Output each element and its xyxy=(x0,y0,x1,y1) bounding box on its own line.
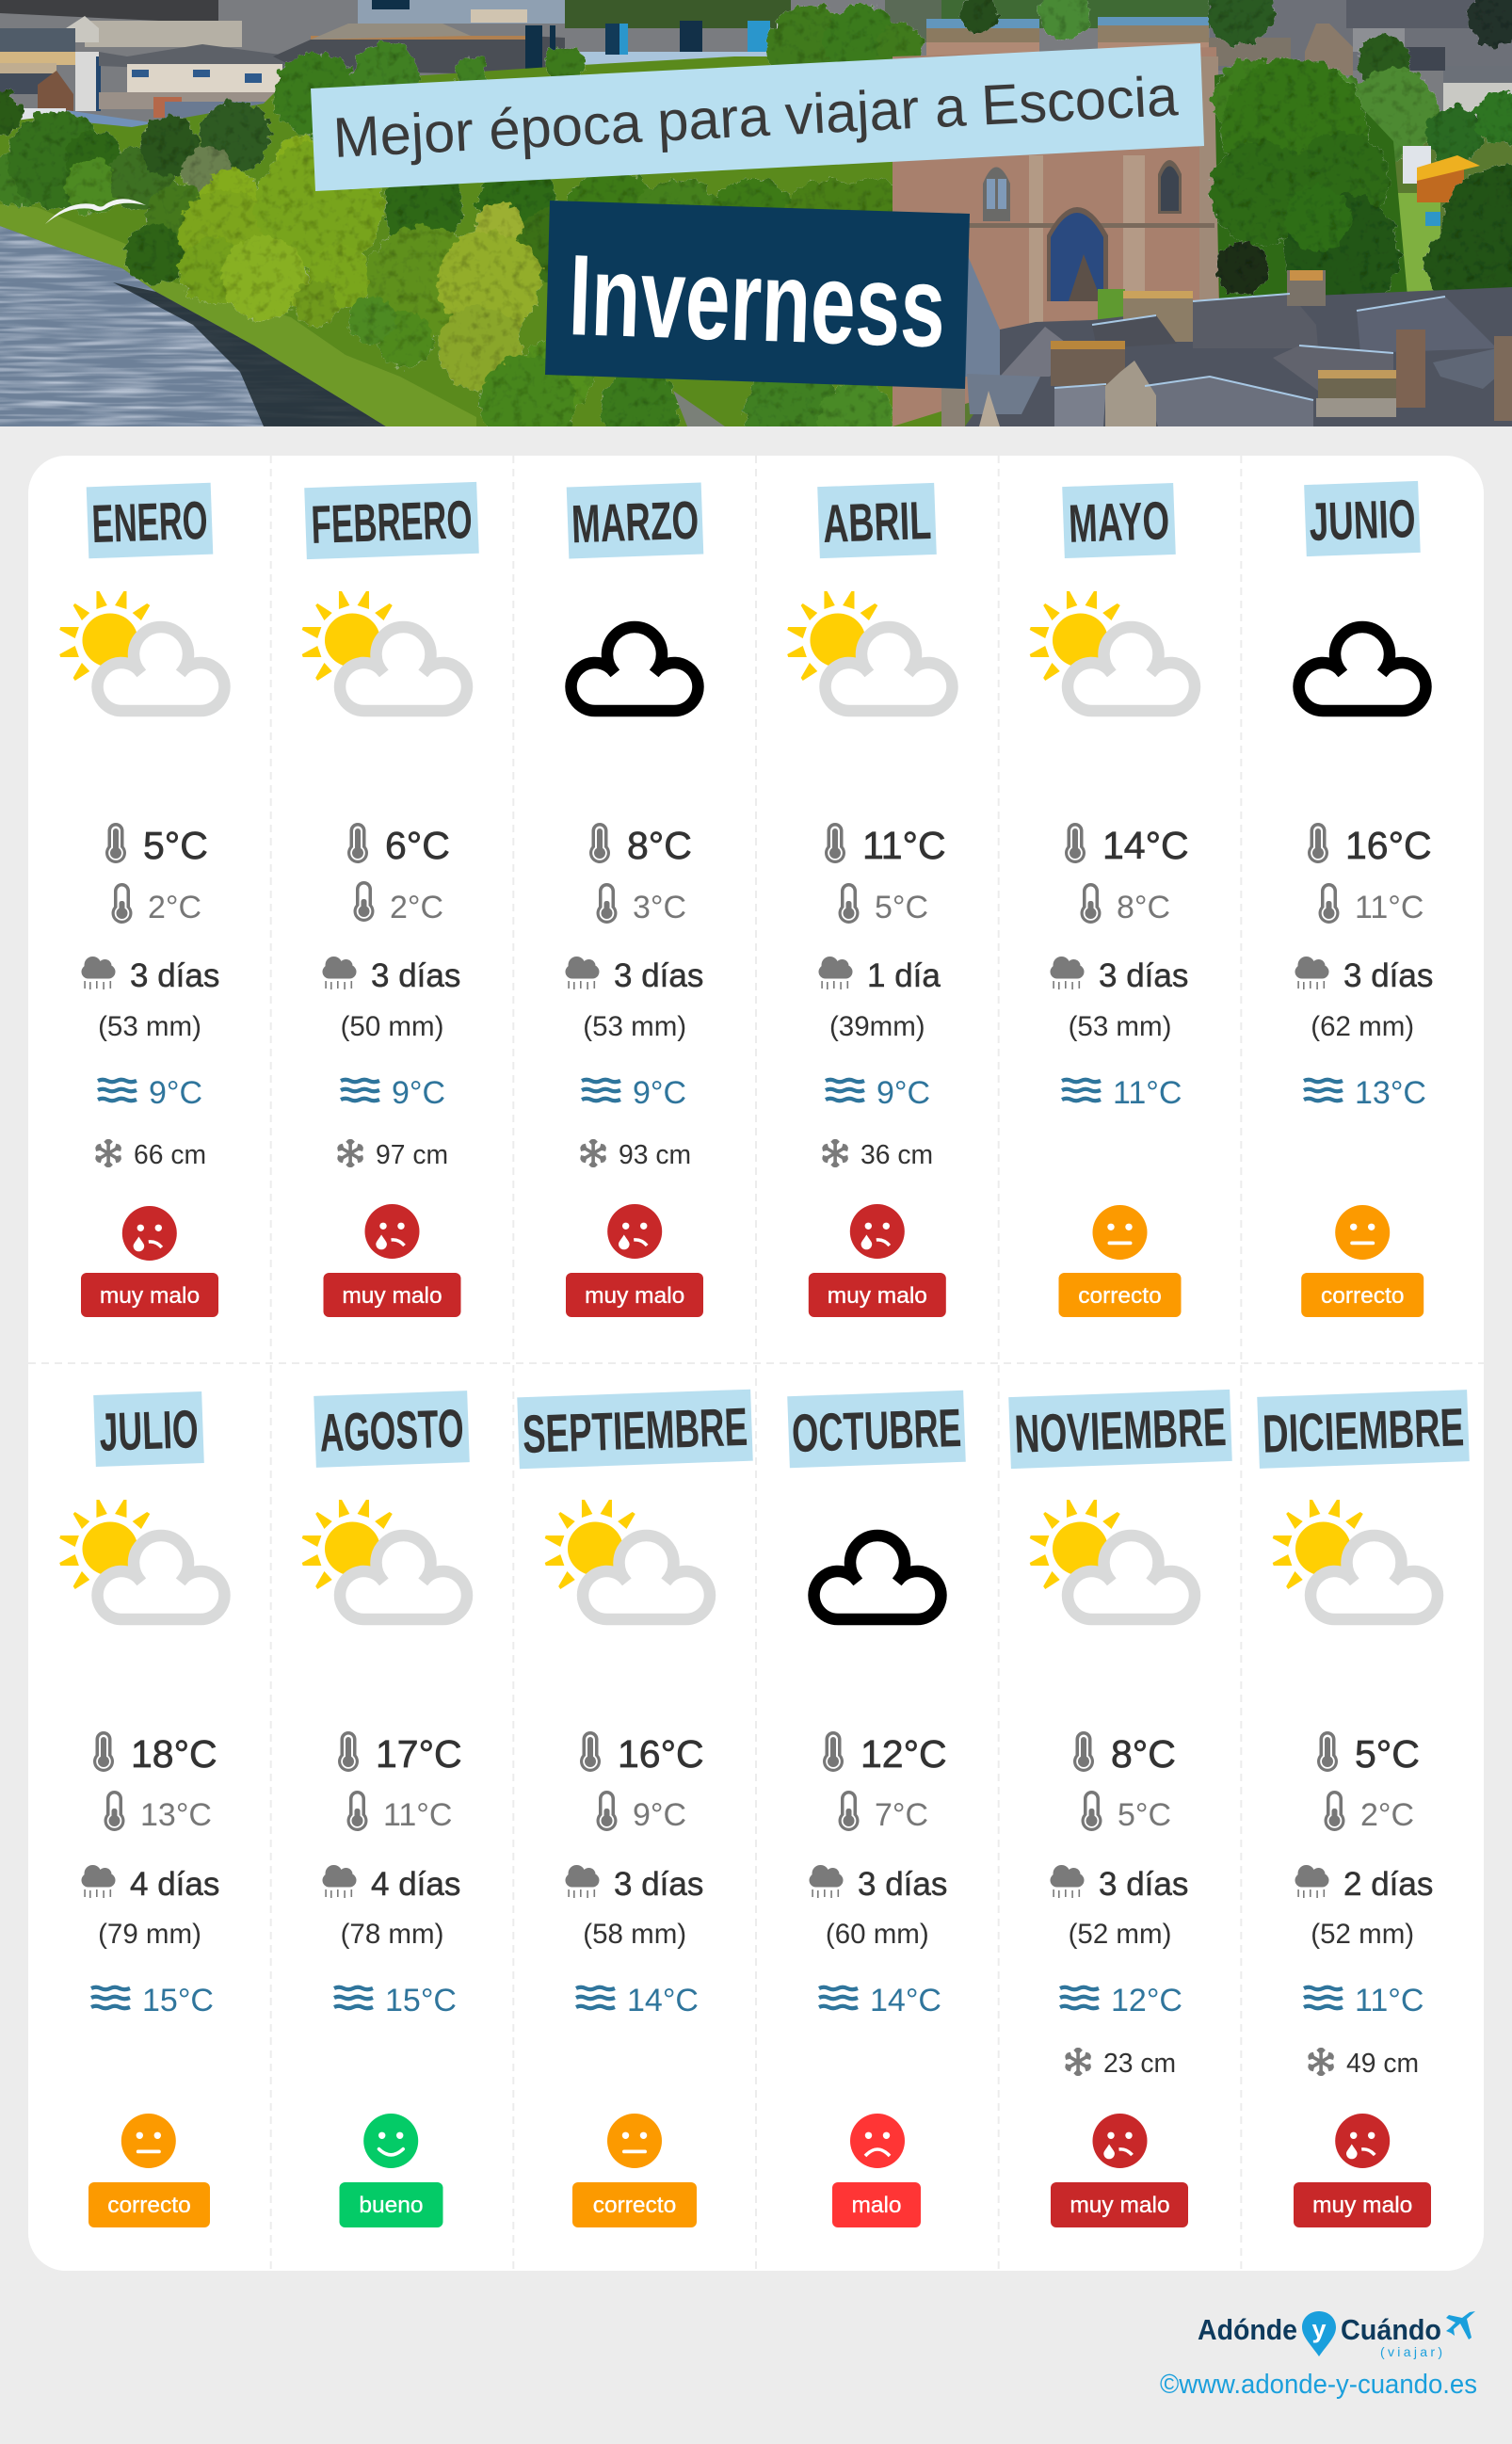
month tag: ABRIL xyxy=(822,490,932,555)
min temperature xyxy=(346,1791,452,1833)
min temperature: 2°C xyxy=(1360,1797,1414,1833)
icon: neutral face xyxy=(1092,1205,1147,1260)
icon: cloud xyxy=(814,1536,941,1619)
month tag xyxy=(517,1390,753,1469)
min temperature xyxy=(1081,883,1170,925)
rating chip xyxy=(1294,2182,1431,2227)
min temperature xyxy=(1318,883,1424,925)
city name banner: Inverness xyxy=(567,231,947,371)
min temperature: 5°C xyxy=(875,890,928,925)
rain days: 3 días xyxy=(130,957,219,994)
rain days: 3 días xyxy=(614,957,703,994)
city name banner xyxy=(545,201,970,389)
rain days xyxy=(81,957,219,994)
sea temperature xyxy=(334,1983,457,2018)
icon: sun and cloud xyxy=(302,591,467,711)
min temperature: 13°C xyxy=(140,1797,212,1833)
sea temperature xyxy=(1060,1983,1182,2018)
min temperature xyxy=(1324,1791,1414,1833)
sea temperature: 9°C xyxy=(392,1075,445,1111)
max temperature: 17°C xyxy=(376,1732,462,1776)
rain days xyxy=(1295,957,1433,994)
rain days: 3 días xyxy=(858,1866,947,1903)
panel: enero xyxy=(59,483,224,1317)
icon: neutral face xyxy=(121,2114,176,2168)
calendar card xyxy=(28,456,1484,2271)
min temperature xyxy=(1081,1791,1171,1833)
rain days: 4 días xyxy=(371,1866,460,1903)
panel: diciembre xyxy=(1257,1390,1470,2227)
icon: cloud xyxy=(571,627,698,711)
month tag xyxy=(1008,1390,1232,1469)
min temperature xyxy=(354,881,443,925)
header photo: Inverness river, trees and cathedral xyxy=(0,0,1512,457)
panel: julio xyxy=(59,1391,224,2227)
rain days xyxy=(565,957,703,994)
month tag: SEPTIEMBRE xyxy=(522,1397,748,1465)
max temperature xyxy=(93,1731,217,1776)
icon: sun and cloud xyxy=(59,591,224,711)
rating chip xyxy=(1051,2182,1188,2227)
max temperature xyxy=(338,1731,462,1776)
month tag xyxy=(1304,481,1421,556)
max temperature: 12°C xyxy=(861,1732,947,1776)
icon: sun and cloud xyxy=(1030,1500,1195,1619)
max temperature xyxy=(580,1731,704,1776)
icon: sun and cloud xyxy=(1273,1500,1438,1619)
rating chip: correcto xyxy=(593,2193,676,2218)
max temperature xyxy=(1073,1731,1176,1776)
rainfall: (62 mm) xyxy=(1311,1011,1414,1042)
rating chip xyxy=(1058,1273,1181,1317)
rainfall: (58 mm) xyxy=(583,1919,686,1950)
sea temperature: 14°C xyxy=(627,1983,699,2018)
icon: happy face xyxy=(363,2114,418,2168)
rainfall: (60 mm) xyxy=(826,1919,929,1950)
min temperature: 2°C xyxy=(390,890,443,925)
sea temperature: 9°C xyxy=(877,1075,930,1111)
sea temperature xyxy=(819,1983,941,2018)
rating chip: correcto xyxy=(1078,1283,1162,1309)
rain days xyxy=(1051,1865,1188,1903)
rain days xyxy=(1295,1865,1433,1903)
rating chip: muy malo xyxy=(1070,2193,1170,2218)
panel: junio xyxy=(1295,481,1433,1317)
min temperature xyxy=(104,1791,212,1833)
month tag xyxy=(787,1391,966,1468)
rain days: 2 días xyxy=(1343,1866,1433,1903)
snow: 36 cm xyxy=(861,1139,933,1169)
rating chip: muy malo xyxy=(585,1283,684,1309)
min temperature: 7°C xyxy=(875,1797,928,1833)
min temperature: 11°C xyxy=(1355,890,1424,925)
min temperature: 5°C xyxy=(1118,1797,1171,1833)
max temperature: 11°C xyxy=(862,824,946,867)
sea temperature xyxy=(1304,1983,1424,2018)
max temperature xyxy=(589,823,692,867)
snow: 49 cm xyxy=(1346,2048,1419,2078)
rainfall: (53 mm) xyxy=(1069,1011,1171,1042)
rating chip xyxy=(1301,1273,1424,1317)
rain days: 1 día xyxy=(867,957,941,994)
rating chip: bueno xyxy=(359,2193,424,2218)
rating chip: muy malo xyxy=(1312,2193,1412,2218)
panel: febrero xyxy=(302,482,479,1317)
sea temperature: 12°C xyxy=(1111,1983,1182,2018)
min temperature xyxy=(597,883,686,925)
panel: octubre xyxy=(787,1391,966,2227)
month tag: JUNIO xyxy=(1308,489,1417,553)
rain days: 4 días xyxy=(130,1866,219,1903)
rating chip xyxy=(832,2182,921,2227)
sea temperature: 9°C xyxy=(633,1075,686,1111)
max temperature: 8°C xyxy=(627,824,692,867)
icon: map pin: y xyxy=(1311,2315,1327,2343)
max temperature xyxy=(347,823,450,867)
rainfall: (78 mm) xyxy=(341,1919,443,1950)
rainfall: (52 mm) xyxy=(1069,1919,1171,1950)
icon: plane xyxy=(1446,2311,1475,2339)
month tag xyxy=(93,1391,204,1467)
panel: marzo xyxy=(565,483,703,1317)
icon: sun and cloud xyxy=(787,591,952,711)
min temperature xyxy=(111,883,201,925)
rating chip: muy malo xyxy=(828,1283,927,1309)
min temperature: 2°C xyxy=(148,890,201,925)
rating chip xyxy=(324,1273,461,1317)
sea temperature xyxy=(98,1075,202,1111)
month tag xyxy=(87,483,213,558)
icon: neutral face xyxy=(607,2114,662,2168)
snow: 97 cm xyxy=(376,1139,448,1169)
rain days xyxy=(81,1865,219,1903)
min temperature: 8°C xyxy=(1117,890,1170,925)
icon: sun and cloud xyxy=(59,1500,224,1619)
rain days xyxy=(810,1865,947,1903)
max temperature: 8°C xyxy=(1111,1732,1176,1776)
max temperature: 14°C xyxy=(1102,824,1189,867)
rain days xyxy=(322,1865,460,1903)
icon: crying face xyxy=(1335,2114,1390,2168)
sea temperature xyxy=(1062,1075,1182,1111)
icon: crying face xyxy=(365,1204,420,1259)
max temperature xyxy=(105,823,208,867)
sea temperature: 15°C xyxy=(142,1983,214,2018)
rainfall: (50 mm) xyxy=(341,1011,443,1042)
rating chip: malo xyxy=(851,2193,902,2218)
max temperature xyxy=(1317,1731,1420,1776)
rating chip xyxy=(339,2182,442,2227)
month tag xyxy=(1062,483,1176,558)
rainfall: (52 mm) xyxy=(1311,1919,1414,1950)
sea temperature: 9°C xyxy=(149,1075,202,1111)
month tag: NOVIEMBRE xyxy=(1014,1397,1228,1465)
icon: map pin xyxy=(1302,2311,1336,2356)
max temperature: 5°C xyxy=(143,824,208,867)
title banner: Mejor época para viajar a Escocia xyxy=(331,64,1180,169)
rain days xyxy=(819,957,941,994)
rain days: 3 días xyxy=(1099,1866,1188,1903)
panel: mayo xyxy=(1030,483,1195,1317)
sea temperature xyxy=(91,1983,214,2018)
rating chip xyxy=(566,1273,703,1317)
rating chip xyxy=(88,2182,210,2227)
snow: 23 cm xyxy=(1103,2048,1176,2078)
max temperature: 16°C xyxy=(618,1732,704,1776)
icon: crying face xyxy=(1092,2114,1147,2168)
month tag: AGOSTO xyxy=(318,1398,465,1464)
sea temperature xyxy=(576,1983,699,2018)
rainfall: (79 mm) xyxy=(98,1919,201,1950)
panel: noviembre xyxy=(1008,1390,1232,2227)
icon: sun and cloud xyxy=(1030,591,1195,711)
sea temperature xyxy=(1304,1075,1426,1111)
sea temperature xyxy=(826,1075,930,1111)
logo: Adónde y Cuándo: (viajar) xyxy=(1380,2344,1442,2359)
snow xyxy=(94,1139,206,1169)
sea temperature xyxy=(582,1075,686,1111)
max temperature: 5°C xyxy=(1355,1732,1420,1776)
sea temperature: 11°C xyxy=(1355,1983,1424,2018)
sea temperature: 13°C xyxy=(1355,1075,1426,1111)
rainfall: (39mm) xyxy=(829,1011,925,1042)
snow: 93 cm xyxy=(619,1139,691,1169)
month tag xyxy=(304,482,479,559)
rating chip xyxy=(81,1273,218,1317)
logo: Adónde y Cuándo: Cuándo xyxy=(1341,2313,1441,2346)
snow xyxy=(1064,2048,1176,2078)
rating chip: correcto xyxy=(107,2193,191,2218)
icon: sad face xyxy=(850,2114,905,2168)
snow xyxy=(1307,2048,1419,2078)
icon: cloud xyxy=(1299,627,1425,711)
tree mass base xyxy=(0,56,941,426)
panel: agosto xyxy=(302,1391,470,2227)
snow xyxy=(336,1139,448,1169)
min temperature xyxy=(838,883,928,925)
max temperature xyxy=(825,823,946,867)
month tag: ENERO xyxy=(90,490,209,555)
rating chip xyxy=(572,2182,697,2227)
rain days xyxy=(565,1865,703,1903)
min temperature: 9°C xyxy=(633,1797,686,1833)
icon: crying face xyxy=(607,1204,662,1259)
icon: crying face xyxy=(850,1204,905,1259)
min temperature xyxy=(838,1791,928,1833)
max temperature: 6°C xyxy=(385,824,450,867)
month tag: OCTUBRE xyxy=(791,1398,962,1464)
rain days: 3 días xyxy=(1343,957,1433,994)
max temperature: 18°C xyxy=(131,1732,217,1776)
month tag: MARZO xyxy=(571,490,700,555)
rain days: 3 días xyxy=(371,957,460,994)
sea temperature xyxy=(341,1075,445,1111)
website url: ©www.adonde-y-cuando.es xyxy=(1160,2370,1477,2400)
panel: abril xyxy=(787,483,952,1317)
rating chip: correcto xyxy=(1321,1283,1404,1309)
panel: septiembre xyxy=(517,1390,753,2227)
title banner xyxy=(311,43,1204,191)
rain days: 3 días xyxy=(614,1866,703,1903)
min temperature: 11°C xyxy=(383,1797,452,1833)
rainfall: (53 mm) xyxy=(583,1011,686,1042)
rain days xyxy=(1051,957,1188,994)
max temperature xyxy=(823,1731,947,1776)
month tag xyxy=(567,483,703,558)
rating chip xyxy=(809,1273,946,1317)
month tag xyxy=(314,1391,470,1468)
max temperature xyxy=(1065,823,1189,867)
snow xyxy=(579,1139,691,1169)
min temperature: 3°C xyxy=(633,890,686,925)
snow: 66 cm xyxy=(134,1139,206,1169)
max temperature: 16°C xyxy=(1345,824,1432,867)
logo: Adónde y Cuándo: Adónde xyxy=(1198,2313,1297,2346)
rain days: 3 días xyxy=(1099,957,1188,994)
icon: sun and cloud xyxy=(545,1500,710,1619)
rating chip: muy malo xyxy=(100,1283,200,1309)
icon: crying face xyxy=(122,1206,177,1261)
month tag: FEBRERO xyxy=(311,490,474,555)
sea temperature: 14°C xyxy=(870,1983,941,2018)
rating chip: muy malo xyxy=(342,1283,442,1309)
min temperature xyxy=(597,1791,686,1833)
sea temperature: 15°C xyxy=(385,1983,457,2018)
rain days xyxy=(322,957,460,994)
icon: sun and cloud xyxy=(302,1500,467,1619)
snow xyxy=(821,1139,933,1169)
rainfall: (53 mm) xyxy=(98,1011,201,1042)
logo: Adónde y Cuándo xyxy=(1198,2311,1475,2359)
month tag: JULIO xyxy=(98,1399,200,1463)
sea temperature: 11°C xyxy=(1113,1075,1182,1111)
month tag xyxy=(817,483,937,558)
month tag: MAYO xyxy=(1068,490,1170,555)
max temperature xyxy=(1308,823,1432,867)
icon: neutral face xyxy=(1335,1205,1390,1260)
